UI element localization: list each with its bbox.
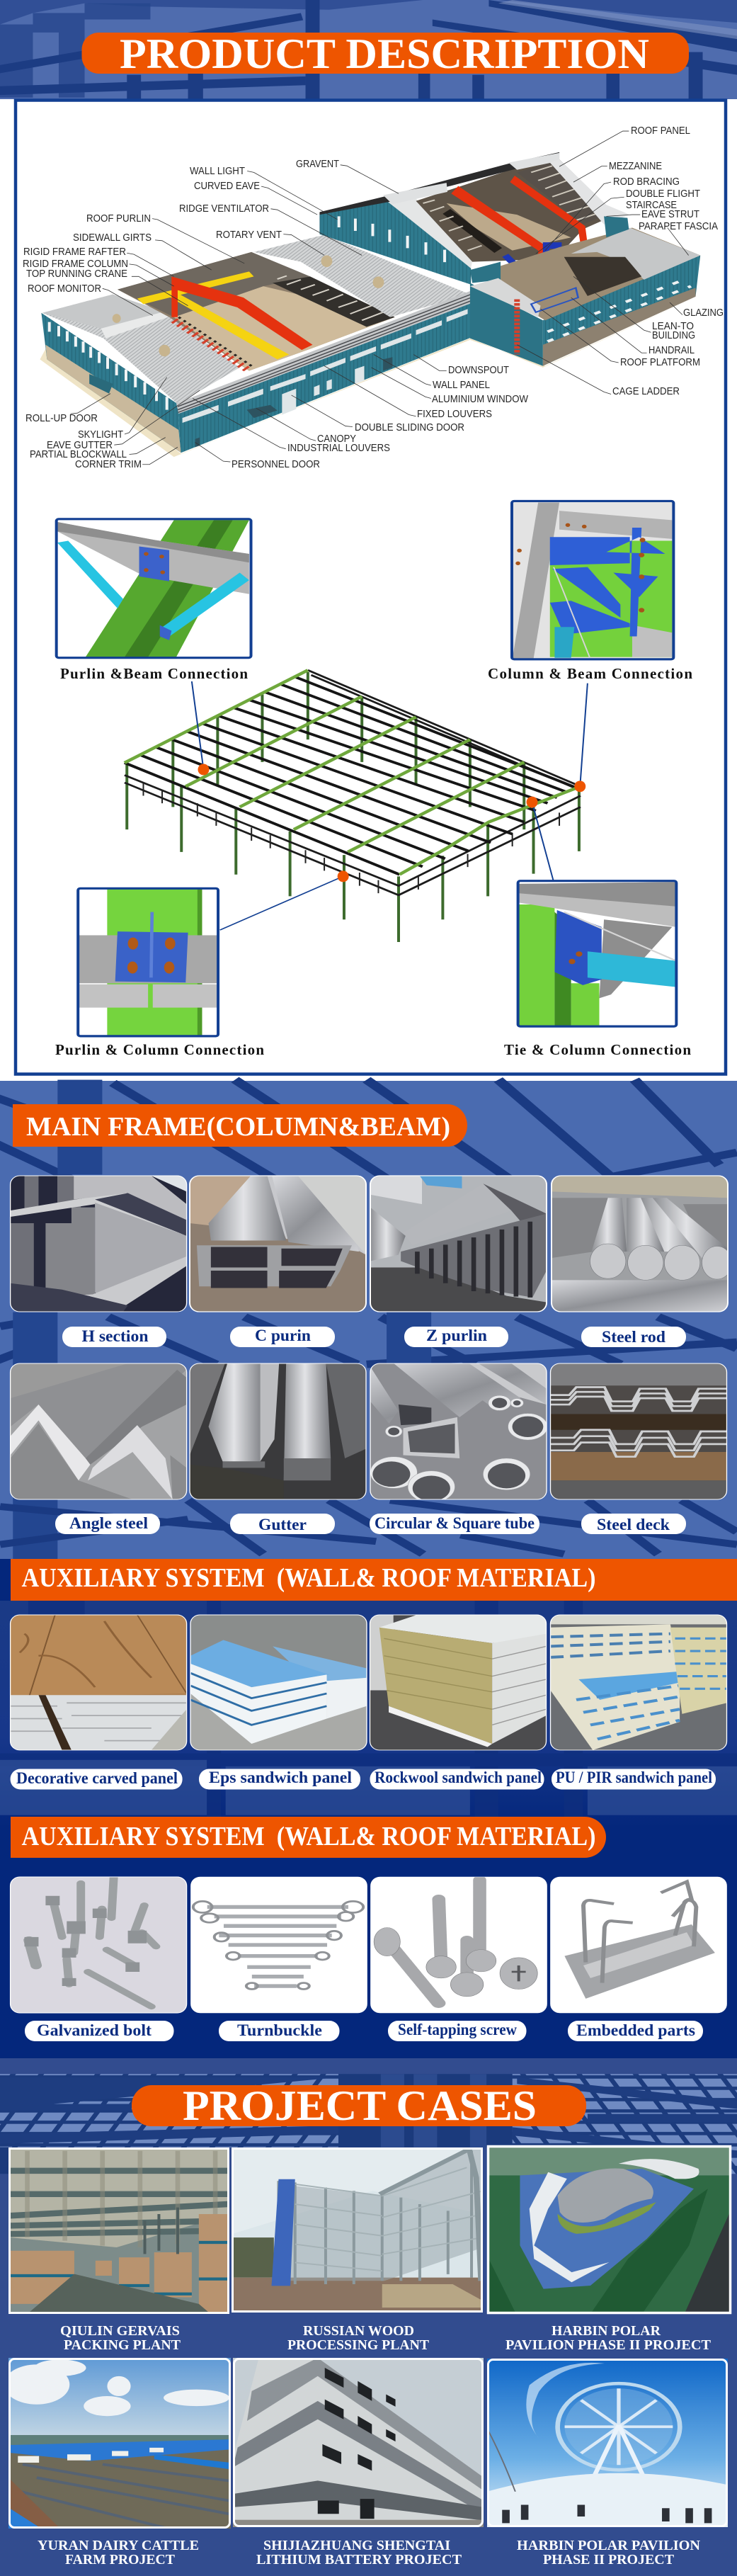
building diagram labels: ROD BRACING xyxy=(613,176,680,188)
labels row: sandwich panels xyxy=(11,1769,716,1789)
building diagram labels: RIGID FRAME COLUMN xyxy=(23,259,128,270)
building diagram labels: ROOF PURLIN xyxy=(86,213,151,225)
photo: harbin polar pavilion aerial xyxy=(487,2145,731,2314)
labels row: main frame row 2: Angle steel xyxy=(69,1514,148,1533)
caption: shijiazhuang shengtai: LITHIUM BATTERY PROJECT xyxy=(256,2552,462,2568)
building diagram labels: DOUBLE FLIGHT xyxy=(626,188,700,200)
building diagram labels: INDUSTRIAL LOUVERS xyxy=(287,443,390,454)
callout lines xyxy=(192,681,588,930)
caption: russian wood: RUSSIAN WOOD xyxy=(303,2323,414,2339)
section background: product description header xyxy=(0,0,737,99)
building diagram labels: LEAN-TO xyxy=(652,321,694,332)
rafters xyxy=(125,670,581,875)
labels row: fasteners xyxy=(25,2021,703,2041)
photo: PU PIR sandwich panel xyxy=(551,1615,726,1750)
upper gable wall xyxy=(319,197,471,285)
photo: H section xyxy=(11,1176,187,1324)
photo: embedded parts xyxy=(551,1877,726,2013)
building diagram labels: RIDGE VENTILATOR xyxy=(179,203,269,215)
labels row: main frame row 2 xyxy=(55,1514,686,1534)
panel: product description white frame xyxy=(0,99,737,1081)
caption: yuran dairy: FARM PROJECT xyxy=(65,2552,175,2568)
photo: decorative carved panel xyxy=(11,1615,187,1750)
diagram: cutaway building xyxy=(40,131,700,465)
photo: Z purlin xyxy=(370,1176,547,1312)
building diagram labels: ROTARY VENT xyxy=(216,229,282,241)
building diagram labels: STAIRCASE xyxy=(626,200,677,211)
labels row: sandwich panels: Decorative carved panel xyxy=(16,1769,178,1788)
labels row: main frame row 2: Gutter xyxy=(258,1516,307,1534)
building diagram labels: CAGE LADDER xyxy=(612,386,680,397)
labels row: sandwich panels: PU / PIR sandwich panel xyxy=(556,1769,712,1787)
caption: qiulin gervais xyxy=(60,2323,181,2353)
callout: purlin and beam xyxy=(57,519,251,658)
labels row: fasteners: Embedded parts xyxy=(576,2021,695,2040)
photo: steel deck xyxy=(551,1363,726,1499)
girts xyxy=(125,670,581,895)
photo: wood processing plant frame xyxy=(232,2147,483,2313)
building diagram labels: ROOF MONITOR xyxy=(28,283,101,295)
yellow crane xyxy=(162,291,289,359)
photo: yuran dairy cattle farm xyxy=(4,2358,231,2529)
labels row: main frame row 1: C purin xyxy=(255,1327,311,1345)
building diagram labels: SIDEWALL GIRTS xyxy=(73,232,152,244)
handrail platform and ladder xyxy=(531,288,578,312)
gravent rolls xyxy=(319,152,559,215)
connection markers xyxy=(198,764,585,882)
building diagram labels: ALUMINIUM WINDOW xyxy=(432,394,528,405)
caption: harbin polar xyxy=(505,2323,711,2353)
building diagram labels: EAVE GUTTER xyxy=(47,440,113,451)
lean-to building xyxy=(470,283,543,366)
panel border xyxy=(16,101,726,1074)
ground slab xyxy=(40,297,696,457)
building diagram labels: DOWNSPOUT xyxy=(448,365,509,376)
building diagram labels: MEZZANINE xyxy=(609,161,662,172)
heading band: auxiliary wall and roof material xyxy=(11,1559,737,1601)
labels row: fasteners: Self-tapping screw xyxy=(398,2021,517,2039)
caption: shijiazhuang shengtai xyxy=(256,2538,462,2568)
photo: turnbuckle xyxy=(191,1877,367,2013)
building left end wall xyxy=(41,313,181,453)
photo: shijiazhuang lithium battery building xyxy=(233,2358,484,2527)
photo: harbin polar ferris wheel xyxy=(487,2359,728,2527)
upper interior xyxy=(416,159,616,262)
photo: eps sandwich panel xyxy=(190,1615,367,1750)
labels row: main frame row 1: Z purlin xyxy=(426,1327,487,1345)
building diagram labels: PARAPET FASCIA xyxy=(639,221,718,232)
callout caption: column and beam: Column & Beam Connection xyxy=(488,665,692,682)
caption: yuran dairy: YURAN DAIRY CATTLE xyxy=(38,2538,199,2553)
roof panel curve xyxy=(550,159,630,225)
caption: russian wood xyxy=(287,2323,429,2353)
labels row: main frame row 1: H section xyxy=(82,1327,149,1346)
heading tag: auxiliary wall and roof material second: AUXILIARY SYSTEM (WALL& ROOF MATERIAL) xyxy=(21,1822,596,1851)
roof main xyxy=(42,295,240,404)
caption: harbin polar pavilion: HARBIN POLAR PAVILION xyxy=(517,2538,700,2553)
photo: steel rod xyxy=(552,1176,732,1312)
caption: qiulin gervais: PACKING PLANT xyxy=(64,2337,181,2353)
building diagram labels: FIXED LOUVERS xyxy=(417,409,492,420)
labels row: sandwich panels: Rockwool sandwich panel xyxy=(375,1769,542,1787)
heading pill: PRODUCT DESCRIPTION: PRODUCT DESCRIPTION xyxy=(120,30,649,77)
front wall louvers and doors xyxy=(183,309,468,423)
callout caption: purlin and column: Purlin & Column Connection xyxy=(55,1041,264,1058)
photo: rockwool sandwich panel xyxy=(370,1615,547,1750)
callout: column and beam xyxy=(512,501,673,659)
caption: qiulin gervais: QIULIN GERVAIS xyxy=(60,2323,180,2339)
callout caption: tie and column: Tie & Column Connection xyxy=(504,1041,691,1058)
section background: auxiliary system xyxy=(0,1559,737,2058)
end wall windows xyxy=(48,322,168,410)
heading tag: auxiliary wall and roof material second xyxy=(11,1817,606,1858)
section background: main frame steel lattice xyxy=(0,1079,737,1563)
heading tag: main frame: MAIN FRAME(COLUMN&BEAM) xyxy=(26,1112,450,1142)
labels row: main frame row 1 xyxy=(62,1327,686,1347)
building diagram labels: CURVED EAVE xyxy=(194,181,260,192)
heading pill: PROJECT CASES: PROJECT CASES xyxy=(183,2082,537,2129)
purlins xyxy=(125,677,576,875)
caption: harbin polar: PAVILION PHASE II PROJECT xyxy=(505,2337,711,2353)
diagram: steel frame with connection callouts xyxy=(57,501,676,1036)
photo: angle steel xyxy=(11,1363,187,1499)
photo: self-tapping screw xyxy=(371,1877,547,2013)
right roof section xyxy=(254,235,470,317)
photo: galvanized bolt xyxy=(11,1877,187,2013)
callout caption: purlin and beam: Purlin &Beam Connection xyxy=(60,665,248,682)
building diagram labels: EAVE STRUT xyxy=(641,209,699,220)
labels row: main frame row 2: Circular & Square tube xyxy=(375,1514,535,1533)
building diagram labels: ROOF PLATFORM xyxy=(620,357,700,368)
building diagram labels: WALL PANEL xyxy=(433,380,490,391)
photo: C purlin xyxy=(190,1176,366,1312)
building diagram labels xyxy=(23,125,724,470)
callout: tie and column xyxy=(518,881,676,1026)
leader lines xyxy=(71,131,689,465)
labels row: fasteners: Turnbuckle xyxy=(237,2021,322,2040)
building diagram labels: PARTIAL BLOCKWALL xyxy=(30,449,127,460)
building diagram labels: WALL LIGHT xyxy=(190,166,245,177)
building diagram labels: DOUBLE SLIDING DOOR xyxy=(355,422,464,433)
callout: purlin and column xyxy=(78,888,218,1036)
building diagram labels: ROLL-UP DOOR xyxy=(25,413,98,424)
section background: project cases xyxy=(0,2058,737,2576)
building diagram labels: RIGID FRAME RAFTER xyxy=(23,246,126,258)
building diagram labels: CANOPY xyxy=(317,433,356,445)
caption: yuran dairy xyxy=(38,2538,199,2568)
interior cutaway xyxy=(118,252,395,370)
photo: circular and square tube xyxy=(370,1363,547,1502)
building diagram labels: GRAVENT xyxy=(296,159,339,170)
red rigid frame xyxy=(171,276,312,350)
labels row: sandwich panels: Eps sandwich panel xyxy=(209,1769,352,1787)
building diagram labels: PERSONNEL DOOR xyxy=(232,459,320,470)
building diagram labels: ROOF PANEL xyxy=(631,125,690,137)
caption: harbin polar: HARBIN POLAR xyxy=(552,2323,661,2339)
photo: gutter xyxy=(190,1363,366,1499)
building diagram labels: GLAZING xyxy=(683,307,724,319)
eave gutter xyxy=(176,291,472,414)
back and side columns xyxy=(127,672,579,942)
building diagram labels: TOP RUNNING CRANE xyxy=(26,268,127,280)
photo: packing plant warehouse xyxy=(8,2147,229,2314)
caption: russian wood: PROCESSING PLANT xyxy=(287,2337,429,2353)
building diagram labels: HANDRAIL xyxy=(649,345,695,356)
caption: harbin polar pavilion: PHASE II PROJECT xyxy=(543,2552,674,2568)
labels row: main frame row 2: Steel deck xyxy=(597,1516,670,1534)
building diagram labels: CORNER TRIM xyxy=(75,459,142,470)
labels row: fasteners: Galvanized bolt xyxy=(37,2021,152,2040)
heading band: auxiliary wall and roof material: AUXILIARY SYSTEM (WALL& ROOF MATERIAL) xyxy=(21,1563,596,1593)
caption: harbin polar pavilion xyxy=(517,2538,700,2568)
caption: shijiazhuang shengtai: SHIJIAZHUANG SHENGTAI xyxy=(263,2538,450,2553)
front wall xyxy=(178,295,471,453)
heading tag: main frame xyxy=(13,1104,467,1147)
building diagram labels: BUILDING xyxy=(652,330,695,341)
building diagram labels: SKYLIGHT xyxy=(78,429,123,441)
labels row: main frame row 1: Steel rod xyxy=(602,1328,665,1346)
